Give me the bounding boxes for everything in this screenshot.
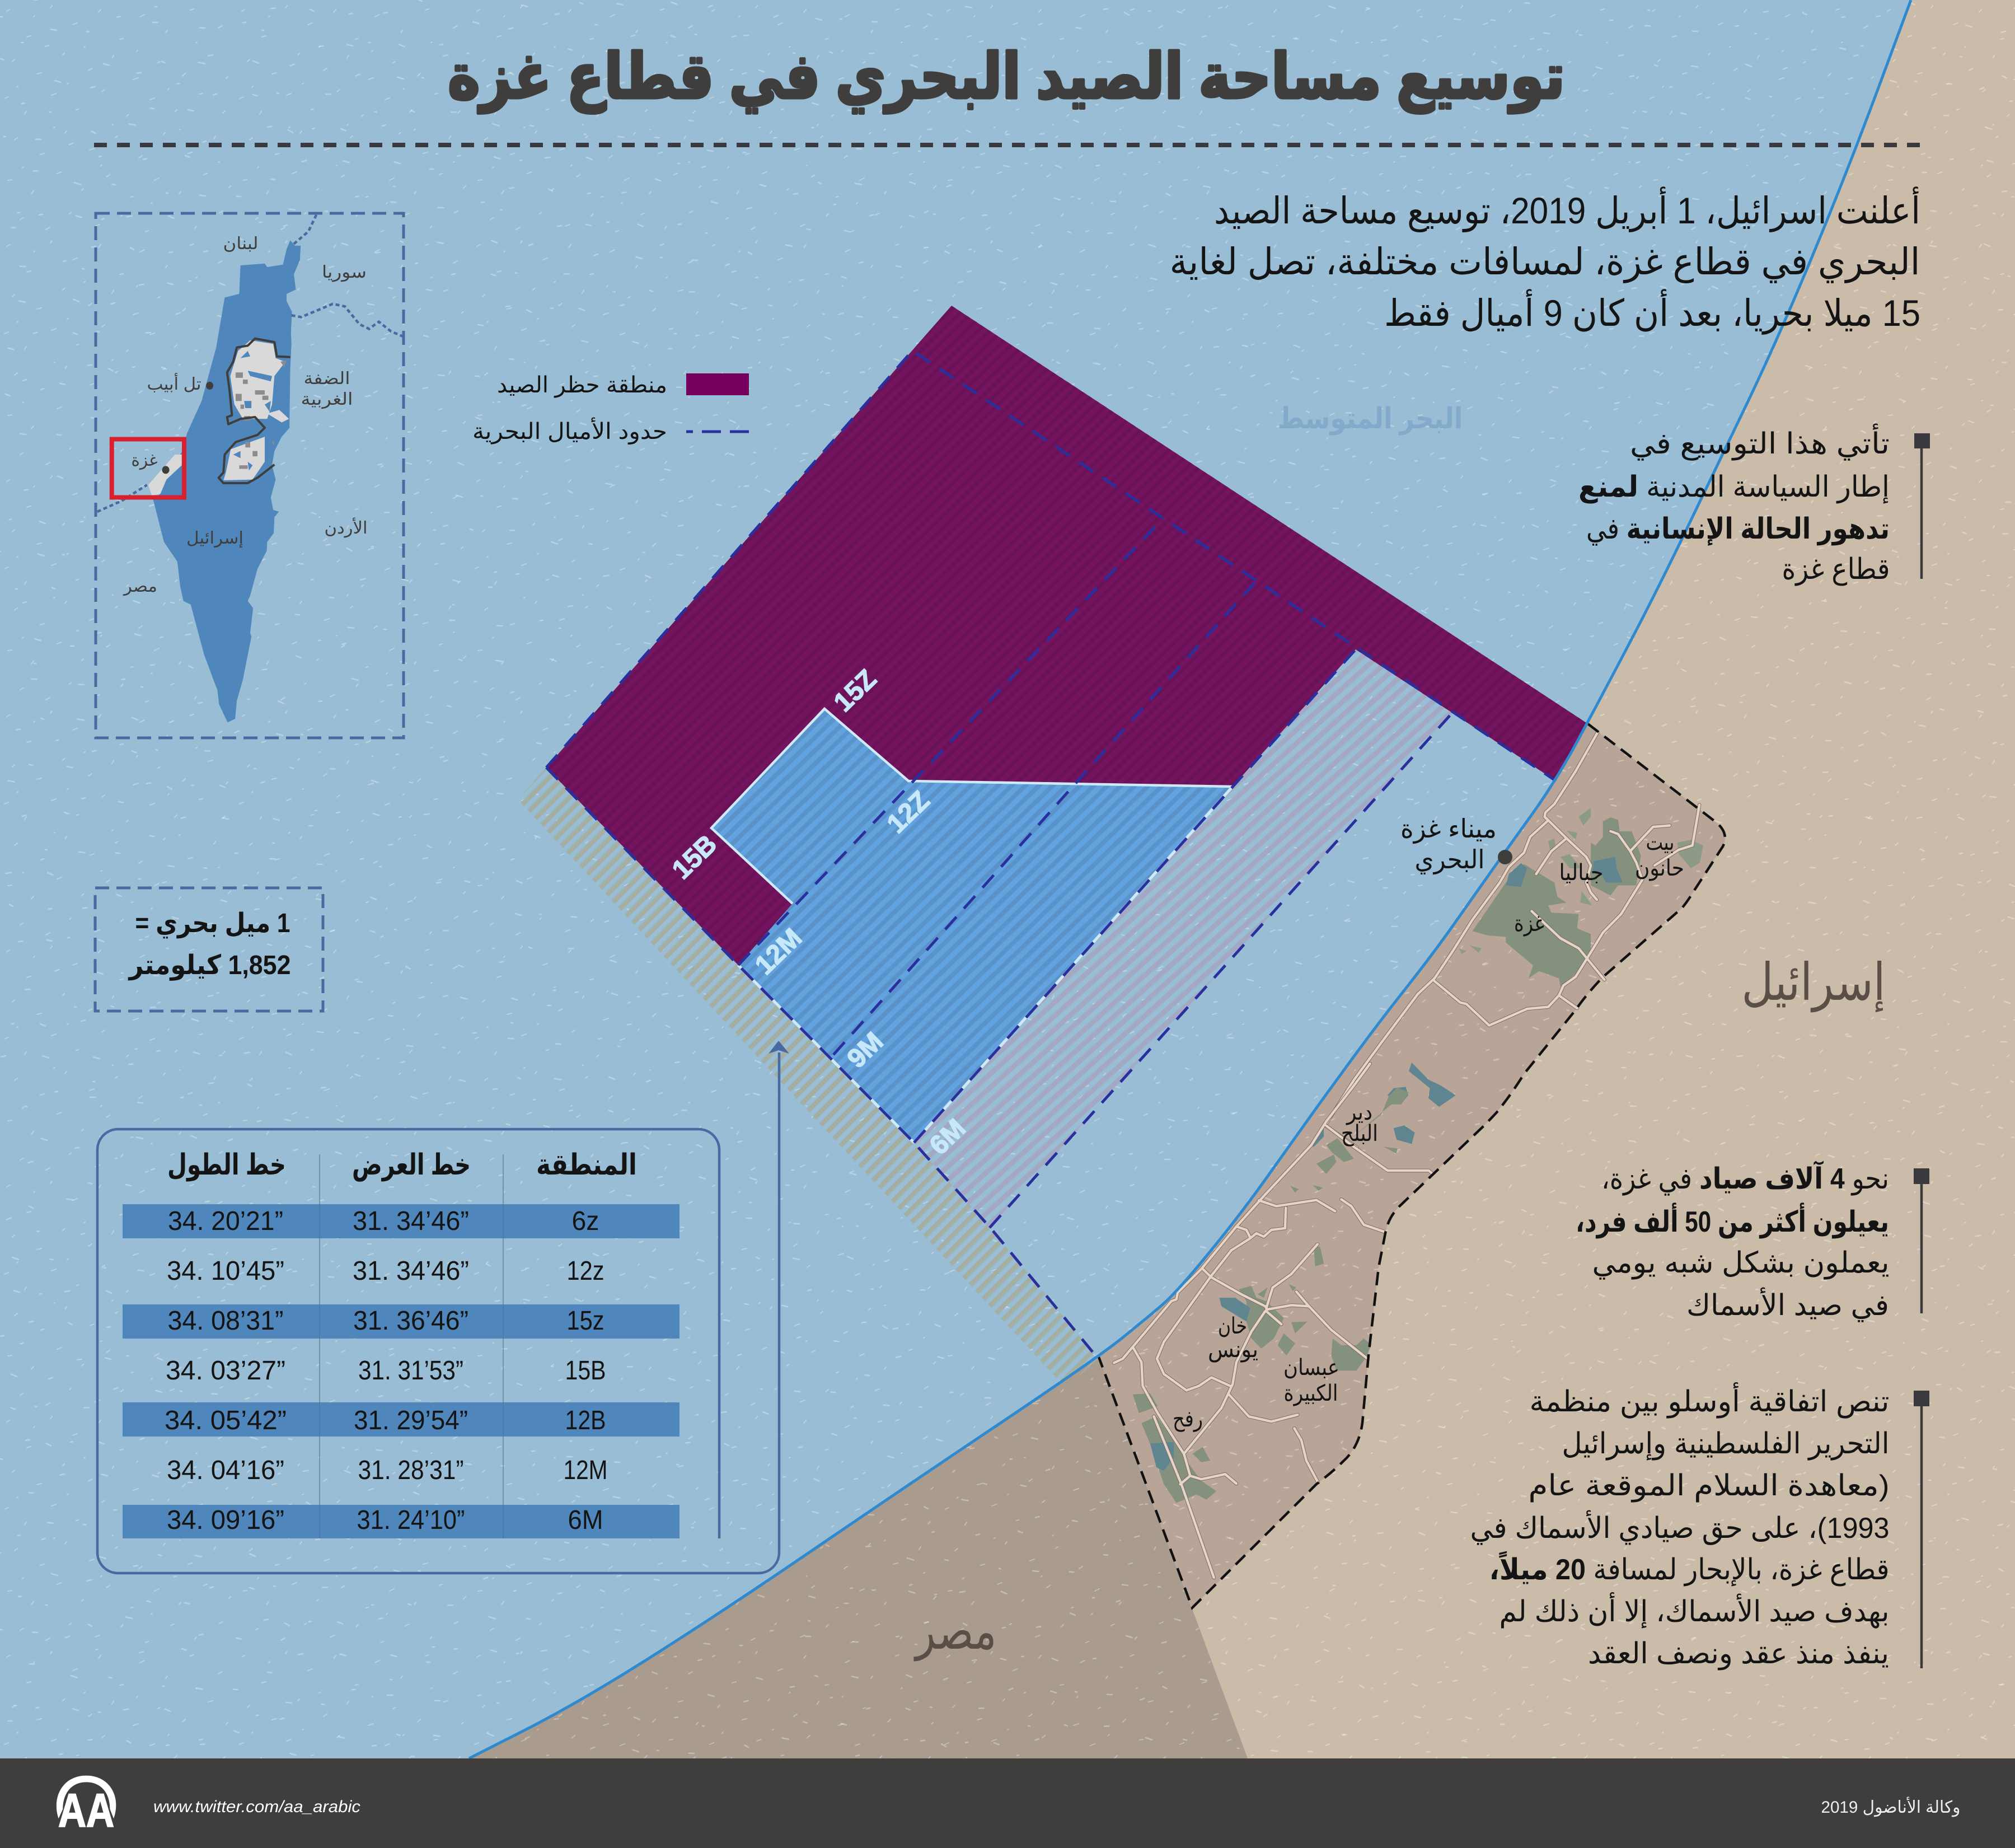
text block: context of expansion: إطار السياسة المدنية لمنع xyxy=(1578,471,1890,504)
Gaza city labels: الكبيرة xyxy=(1284,1381,1338,1406)
zone label 12M: 12M xyxy=(749,923,808,981)
Gaza city labels: يونس xyxy=(1208,1337,1258,1363)
intro text: 15 ميلا بحريا، بعد أن كان 9 أميال فقط xyxy=(1384,289,1920,335)
Gaza city labels: غزة xyxy=(1514,911,1544,937)
sea label: البحر المتوسط xyxy=(1277,403,1463,436)
inset locator map: سوريا xyxy=(322,263,367,282)
footer bar xyxy=(0,1758,2015,1848)
footer credit: وكالة الأناضول 2019 xyxy=(1821,1796,1960,1817)
arrow head xyxy=(768,1041,789,1054)
Gaza sea port marker and label xyxy=(1400,814,1512,875)
text block: fishermen numbers: يعملون بشكل شبه يومي xyxy=(1592,1247,1890,1280)
table rows: 31. 31’53” xyxy=(358,1356,463,1386)
text block: Oslo accords: (معاهدة السلام الموقعة عام xyxy=(1528,1470,1890,1503)
permitted fishing zone xyxy=(711,709,1233,1143)
land: Israel xyxy=(1103,0,2015,1758)
table rows: 34. 05’42” xyxy=(165,1406,287,1435)
footer link: www.twitter.com/aa_arabic xyxy=(153,1798,360,1816)
table headers: المنطقة xyxy=(536,1149,637,1181)
zone label 12Z: 12Z xyxy=(882,785,935,839)
hatched band: green buffer zone xyxy=(493,750,1114,1372)
icon: Anadolu Agency logo: AA xyxy=(58,1784,114,1837)
text block: context of expansion: قطاع غزة xyxy=(1782,553,1890,586)
table rows: 12z xyxy=(566,1256,604,1286)
table row stripes xyxy=(123,1204,680,1538)
country label: Israel: إسرائيل xyxy=(1742,954,1885,1013)
Gaza city labels: جباليا xyxy=(1559,860,1603,885)
table rows: 34. 20’21” xyxy=(168,1206,283,1236)
table rows: 12B xyxy=(565,1406,606,1435)
table rows: 31. 34’46” xyxy=(353,1256,469,1286)
text block: Oslo accords: قطاع غزة، بالإبحار لمسافة 20 ميلاً، xyxy=(1489,1551,1890,1587)
text block: Oslo accords xyxy=(1470,1382,1929,1671)
Gaza city labels xyxy=(1173,830,1684,1432)
text block: fishermen numbers xyxy=(1576,1161,1929,1322)
callout: nautical mile conversion: 1 ميل بحري = xyxy=(135,909,290,939)
Gaza sea port marker and label: ميناء غزة xyxy=(1400,814,1497,844)
table rows: 34. 10’45” xyxy=(167,1256,284,1286)
table rows: 34. 03’27” xyxy=(166,1356,285,1386)
table rows: 34. 08’31” xyxy=(168,1306,283,1336)
inset locator map: إسرائيل xyxy=(186,529,243,548)
Gaza settlements: south xyxy=(1133,1087,1409,1503)
land: Gaza Strip xyxy=(1086,700,1725,1608)
inset locator map: غزة xyxy=(131,451,158,470)
inset locator map: الضفة xyxy=(303,369,350,388)
text block: context of expansion: تدهور الحالة الإنسانية في xyxy=(1586,513,1890,546)
intro text: أعلنت اسرائيل، 1 أبريل 2019، توسيع مساحة الصيد xyxy=(1214,186,1920,232)
inset locator map: مصر xyxy=(123,577,157,596)
table rows: 31. 28’31” xyxy=(358,1456,463,1485)
legend: حدود الأميال البحرية xyxy=(472,417,667,445)
text block: context of expansion: تأتي هذا التوسيع في xyxy=(1630,423,1890,461)
zone label 15B: 15B xyxy=(667,829,723,885)
fishing ban zone xyxy=(546,306,1588,965)
Gaza city labels: دير xyxy=(1346,1100,1372,1125)
table rows: 34. 04’16” xyxy=(167,1456,284,1485)
Gaza land border xyxy=(1099,724,1725,1608)
Gaza city labels: رفح xyxy=(1173,1407,1203,1432)
table headers: خط الطول xyxy=(167,1149,286,1182)
table rows: 15B xyxy=(565,1356,606,1386)
coastline xyxy=(469,0,1911,1758)
Gaza city labels: البلح xyxy=(1341,1121,1378,1147)
title divider xyxy=(94,143,1922,147)
callout: nautical mile conversion xyxy=(95,888,323,1011)
Gaza city labels: بيت xyxy=(1646,830,1675,855)
table rows: 34. 09’16” xyxy=(167,1505,284,1535)
zone label 9M: 9M xyxy=(842,1027,889,1074)
callout: nautical mile conversion: 1,852 كيلومتر xyxy=(128,951,291,981)
Gaza roads: south xyxy=(1114,1064,1432,1578)
text block: Oslo accords: ينفذ منذ عقد ونصف العقد xyxy=(1588,1638,1889,1671)
zone label 15Z: 15Z xyxy=(828,664,882,718)
table headers: خط العرض xyxy=(352,1149,471,1182)
coordinates table panel xyxy=(97,1041,789,1573)
table rows: 31. 24’10” xyxy=(357,1505,465,1535)
table rows: 31. 29’54” xyxy=(354,1406,468,1435)
text block: Oslo accords: التحرير الفلسطينية وإسرائيل xyxy=(1562,1428,1890,1461)
intro text xyxy=(1170,186,1920,335)
table rows xyxy=(165,1206,608,1535)
nautical mile boundaries xyxy=(546,353,1556,1359)
text block: Oslo accords: تنص اتفاقية أوسلو بين منظمة xyxy=(1529,1382,1890,1419)
zone label 6M: 6M xyxy=(924,1114,971,1161)
hatched zone: 6 mile strip xyxy=(915,649,1452,1227)
Gaza settlements: north xyxy=(1388,808,1703,1144)
table rows: 12M xyxy=(563,1456,608,1485)
table rows: 6z xyxy=(572,1206,599,1236)
table rows: 31. 34’46” xyxy=(353,1206,469,1236)
table headers xyxy=(167,1149,637,1182)
legend xyxy=(472,373,749,445)
inset locator map: الأردن xyxy=(325,517,367,537)
table rows: 31. 36’46” xyxy=(353,1306,468,1336)
text block: fishermen numbers: يعيلون أكثر من 50 ألف فرد، xyxy=(1576,1203,1889,1239)
text block: Oslo accords: بهدف صيد الأسماك، إلا أن ذلك لم xyxy=(1499,1592,1890,1629)
intro text: البحري في قطاع غزة، لمسافات مختلفة، تصل لغاية xyxy=(1170,241,1920,283)
inset locator map: لبنان xyxy=(223,235,259,253)
Gaza roads: north xyxy=(1325,733,1699,1148)
land: Egypt xyxy=(472,1358,1248,1758)
title: توسيع مساحة الصيد البحري في قطاع غزة xyxy=(448,41,1565,114)
text block: Oslo accords: 1993)، على حق صيادي الأسماك في xyxy=(1470,1510,1890,1545)
text block: context of expansion xyxy=(1578,423,1930,586)
Gaza city labels: خان xyxy=(1218,1314,1247,1339)
legend: منطقة حظر الصيد xyxy=(497,373,667,398)
Gaza city labels: عبسان xyxy=(1283,1355,1339,1380)
Gaza sea port marker and label: البحري xyxy=(1415,845,1484,875)
country label: Egypt: مصر xyxy=(913,1603,996,1662)
text block: fishermen numbers: في صيد الأسماك xyxy=(1686,1287,1889,1322)
inset locator map: الغربية xyxy=(301,390,353,409)
table rows: 15z xyxy=(566,1306,604,1336)
table rows: 6M xyxy=(568,1505,603,1535)
Gaza city labels: حانون xyxy=(1635,856,1684,881)
inset locator map: تل أبيب xyxy=(147,372,202,394)
text block: fishermen numbers: نحو 4 آلاف صياد في غزة، xyxy=(1601,1161,1889,1196)
inset locator map xyxy=(96,213,404,738)
